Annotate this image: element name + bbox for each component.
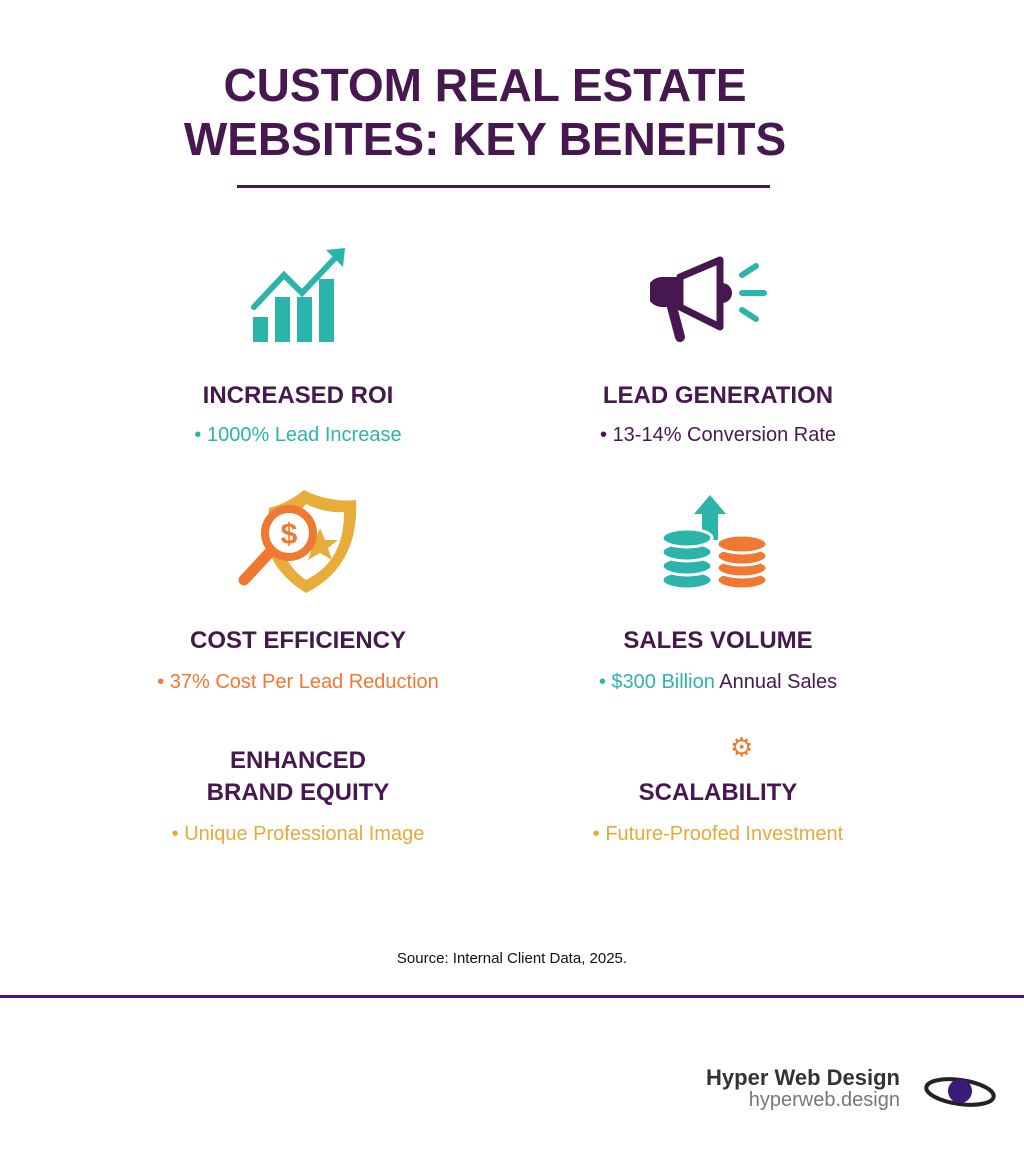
title: CUSTOM REAL ESTATE — [223, 59, 747, 111]
panel: increased roi: INCREASED ROI — [203, 382, 393, 409]
panel: brand equity — [172, 747, 424, 845]
panel: scalability — [593, 779, 844, 845]
panel: cost efficiency — [157, 627, 439, 693]
icon: shield with magnifier — [238, 490, 356, 593]
panel: scalability: • Future-Proofed Investment — [593, 823, 843, 845]
icon: coins with arrow — [664, 495, 766, 588]
brand text — [706, 1065, 900, 1111]
icon: shield with magnifier: $ — [281, 518, 298, 551]
title underline — [237, 185, 770, 188]
panel: lead generation: LEAD GENERATION — [603, 382, 833, 409]
panel: lead generation — [600, 382, 836, 446]
brand text: hyperweb.design — [749, 1089, 900, 1111]
panel: brand equity: ENHANCED — [230, 747, 366, 774]
panel: cost efficiency: • 37% Cost Per Lead Reduction — [157, 671, 439, 693]
title: WEBSITES: KEY BENEFITS — [184, 113, 786, 165]
source: Source: Internal Client Data, 2025. — [397, 950, 627, 967]
panel: sales volume: SALES VOLUME — [623, 627, 813, 654]
panel: brand equity: • Unique Professional Image — [172, 823, 424, 845]
icon: gear: ⚙ — [730, 732, 753, 762]
panel: cost efficiency: COST EFFICIENCY — [190, 627, 406, 654]
brand text: Hyper Web Design — [706, 1065, 900, 1090]
panel: lead generation: • 13-14% Conversion Rate — [600, 424, 836, 446]
icon: growth chart — [251, 248, 345, 342]
panel: scalability: SCALABILITY — [639, 779, 797, 806]
footer line — [0, 995, 1024, 998]
panel: sales volume: • $300 Billion Annual Sales — [599, 671, 837, 693]
icon: logo — [924, 1077, 996, 1107]
panel: increased roi — [194, 382, 402, 446]
panel: brand equity: BRAND EQUITY — [207, 779, 389, 806]
panel: increased roi: • 1000% Lead Increase — [194, 424, 402, 446]
panel: sales volume — [599, 627, 837, 693]
title — [184, 59, 786, 165]
icon: megaphone — [650, 256, 767, 342]
